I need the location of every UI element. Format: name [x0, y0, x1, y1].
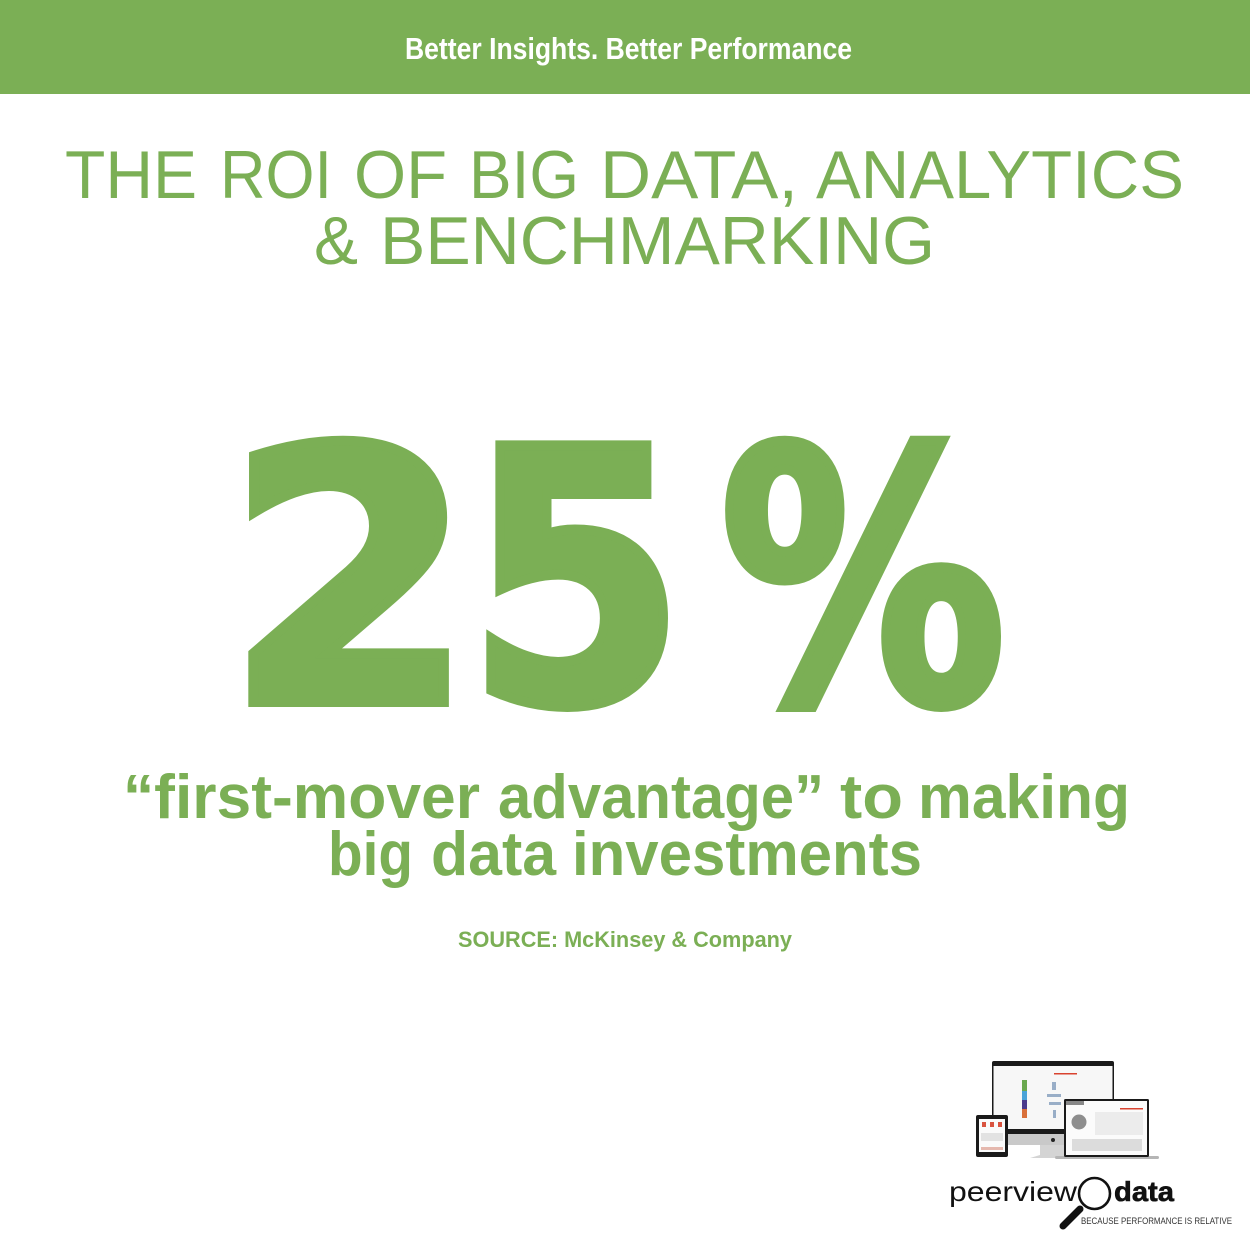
title: BIG — [469, 137, 579, 213]
icon: tablet — [976, 1115, 1008, 1157]
title — [65, 137, 1184, 279]
statistic description: to — [840, 763, 903, 832]
big statistic: 25%: % — [720, 376, 1006, 786]
title: OF — [354, 137, 447, 213]
logo: wordmark: data — [1114, 1176, 1174, 1207]
big statistic: 25%: 2 — [225, 376, 475, 786]
title: THE — [65, 137, 197, 213]
statistic description: investments — [572, 820, 922, 889]
statistic description: advantage” — [498, 763, 824, 832]
source note: SOURCE: McKinsey & Company — [458, 927, 793, 952]
statistic description — [123, 763, 1130, 889]
title: & — [314, 203, 358, 279]
statistic description: making — [918, 763, 1130, 832]
logo: device illustration — [976, 1061, 1159, 1159]
header banner: Better Insights. Better Performance — [405, 31, 852, 66]
big statistic: 25% — [225, 376, 1006, 786]
statistic description: “first-mover — [123, 763, 480, 832]
title: ROI — [220, 137, 332, 213]
icon: laptop — [1055, 1099, 1159, 1159]
statistic description: data — [431, 820, 557, 889]
statistic description: big — [328, 820, 413, 889]
header banner — [0, 0, 1250, 94]
title: DATA, — [600, 137, 798, 213]
icon: desktop monitor — [992, 1061, 1114, 1158]
title: ANALYTICS — [816, 137, 1184, 213]
big statistic: 25%: 5 — [466, 376, 686, 786]
logo: wordmark: peerview — [949, 1176, 1078, 1207]
logo: wordmark — [949, 1176, 1232, 1227]
icon: magnifying glass — [1063, 1178, 1110, 1226]
title: BENCHMARKING — [380, 203, 935, 279]
